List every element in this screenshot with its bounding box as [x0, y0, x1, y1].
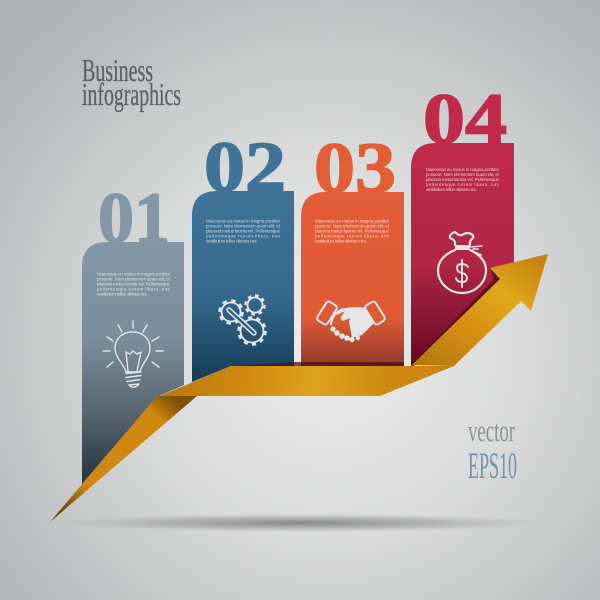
- panel 3 text: pellentesque rutrum libero, non: [315, 234, 390, 238]
- panel 4 text: placerat metus lacinia vel. Pellentesque: [426, 177, 500, 182]
- panel 1 text: placerat metus lacinia vel. Pellentesque: [97, 282, 171, 286]
- panel fold shadows: [231, 262, 514, 366]
- floor shadow: [55, 514, 545, 532]
- panel 3 text: vestibulum tellus ultricies nec.: [315, 238, 367, 244]
- panel 1 text: pellentesque rutrum libero, non: [97, 286, 171, 292]
- icon: gears: [220, 296, 266, 344]
- panel 3: [301, 128, 404, 366]
- panel 2: [192, 127, 294, 382]
- panel 2 text: vestibulum tellus ultricies nec.: [206, 238, 258, 244]
- arrow head: [412, 254, 548, 366]
- panel 4 text: vestibulum tellus ultricies nec.: [426, 187, 477, 192]
- panel 3 body: [301, 192, 404, 366]
- icon: handshake: [316, 300, 386, 342]
- number 01: 01: [98, 178, 170, 258]
- title: infographics: [82, 76, 181, 112]
- panel 3 text: posuere. Nam elementum quam elit, et: [315, 224, 390, 228]
- panel 1: [82, 178, 184, 484]
- panel 2 text: placerat metus lacinia vel. Pellentesque: [206, 228, 281, 234]
- panel 2 text: [206, 218, 281, 244]
- title: [82, 52, 181, 112]
- panel 1 text: [97, 272, 171, 296]
- number 04: 04: [423, 79, 507, 159]
- panel 2 text: Maecenas eu metus in magna porttitor: [206, 218, 281, 224]
- text: EPS10: [468, 446, 517, 487]
- title: Business: [82, 52, 153, 88]
- icon: light bulb: [103, 321, 163, 387]
- panel 2 body: [192, 191, 294, 382]
- panel 3 text: Maecenas eu metus in magna porttitor: [315, 218, 390, 224]
- panel 1 text: vestibulum tellus ultricies nec.: [97, 292, 148, 296]
- panel 3 text: placerat metus lacinia vel. Pellentesque: [315, 228, 390, 234]
- panel 1 text: Maecenas eu metus in magna porttitor: [97, 272, 171, 276]
- panel 2 text: pellentesque rutrum libero, non: [206, 234, 281, 238]
- panel 4 text: [426, 167, 500, 192]
- vector EPS10 label: [468, 413, 517, 487]
- panel 4 text: pellentesque rutrum libero, non: [426, 182, 500, 187]
- panel 2 text: posuere. Nam elementum quam elit, et: [206, 224, 281, 228]
- panel 4 text: Maecenas eu metus in magna porttitor: [426, 167, 500, 172]
- icon: money bag: [438, 232, 486, 293]
- panel 3 text: [315, 218, 390, 244]
- panel 1 body: [82, 242, 184, 484]
- arrow tail: [50, 396, 197, 522]
- vector EPS10 label: vector: [468, 413, 515, 448]
- tail shadow: [82, 397, 157, 488]
- panel 4 body: [411, 143, 514, 365]
- panel 4: [411, 79, 514, 365]
- number 03: 03: [314, 128, 396, 208]
- middle ribbon: [160, 366, 454, 396]
- number 02: 02: [204, 127, 286, 207]
- panel 4 text: posuere. Nam elementum quam elit, et: [426, 172, 500, 177]
- arrow: [50, 254, 548, 522]
- panel 1 text: posuere. Nam elementum quam elit, et: [97, 276, 171, 282]
